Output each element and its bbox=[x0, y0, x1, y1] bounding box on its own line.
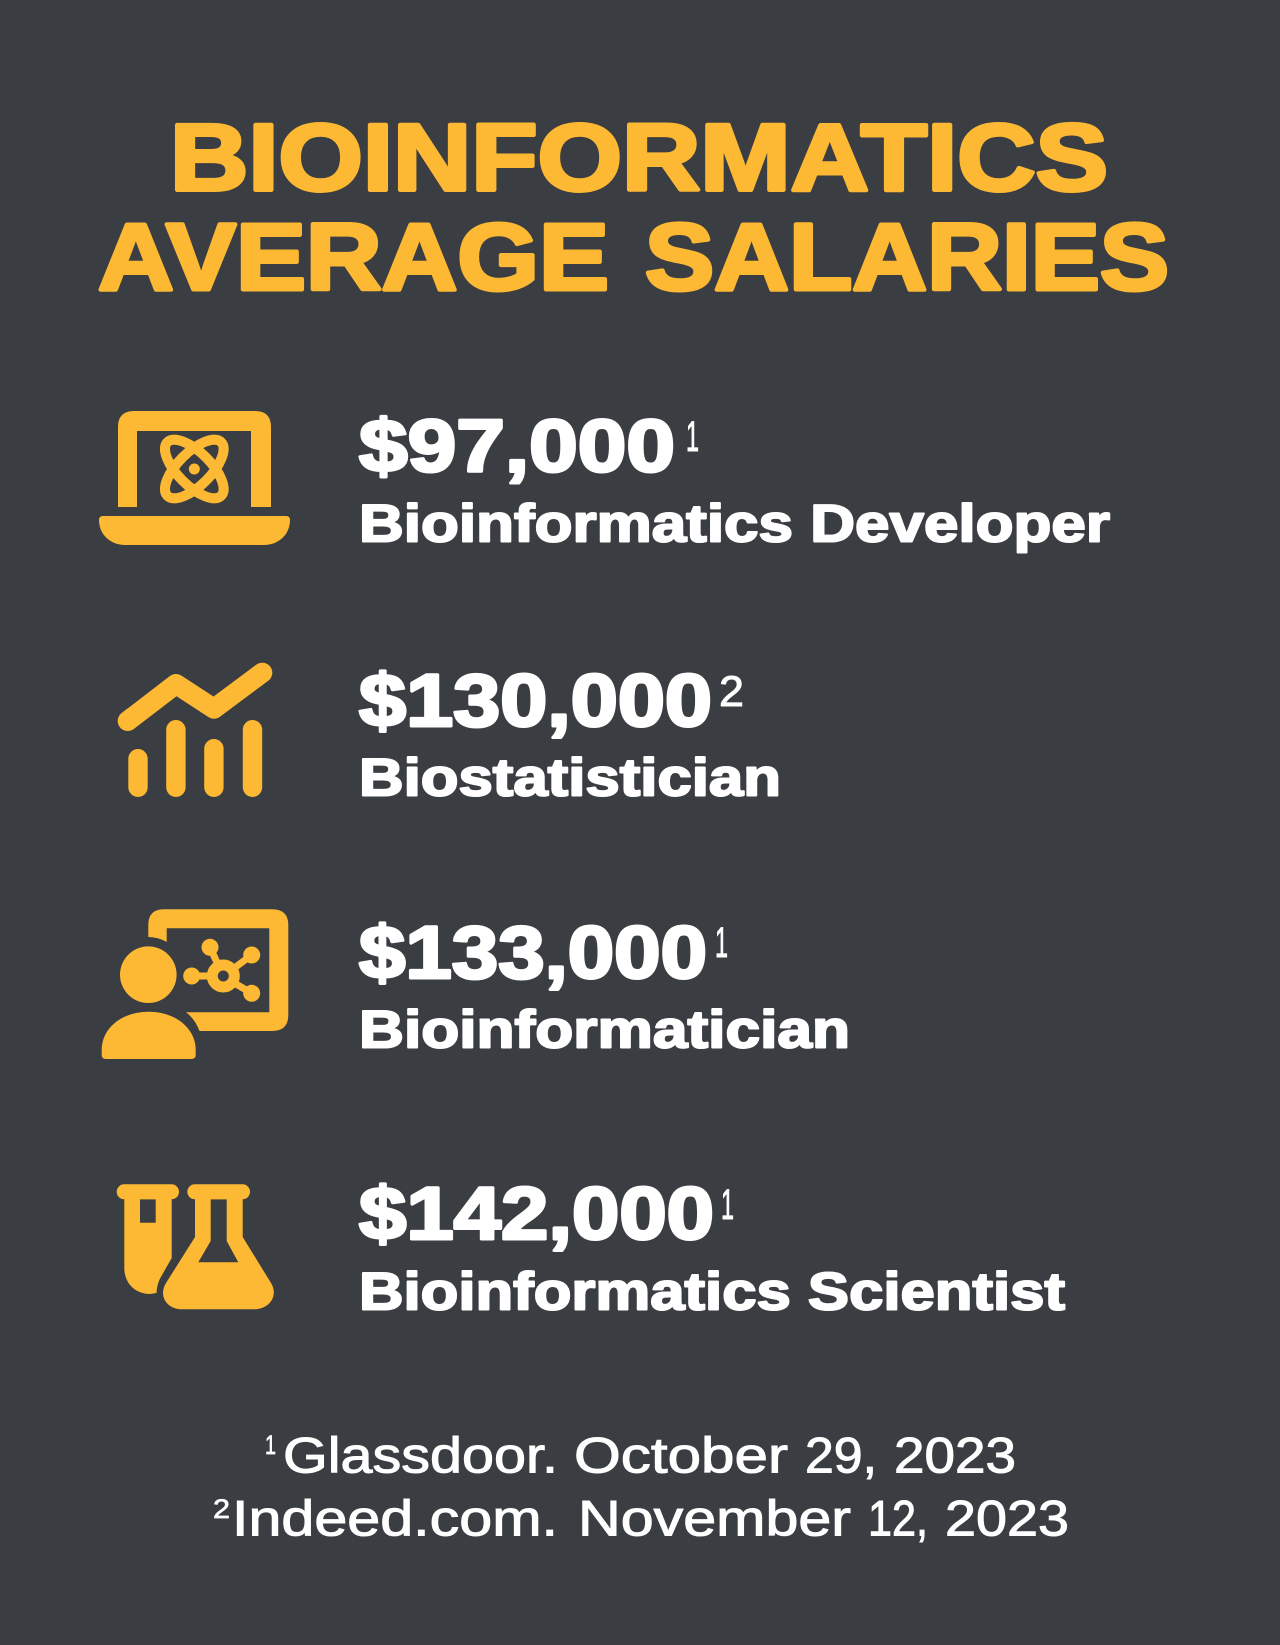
footnotes: sources: October bbox=[574, 1428, 788, 1484]
salary figure: $97,000 bbox=[359, 404, 675, 488]
row: bioinformatician bbox=[102, 909, 850, 1060]
title: SALARIES bbox=[645, 204, 1169, 310]
icon: presenter with molecule board bbox=[102, 909, 288, 1059]
footnotes: sources: 1 bbox=[265, 1430, 276, 1460]
footnotes: sources: 2023 bbox=[894, 1428, 1016, 1484]
footnotes: sources: 29, bbox=[805, 1428, 877, 1484]
job title: Bioinformatics Scientist bbox=[359, 1262, 1065, 1322]
salary figure: $133,000 bbox=[359, 911, 707, 994]
row: bioinformatics scientist bbox=[117, 1172, 1065, 1322]
job title: Bioinformatician bbox=[359, 1000, 850, 1060]
title: BIOINFORMATICS bbox=[170, 105, 1108, 211]
footnote marker: 1 bbox=[686, 413, 699, 461]
title: AVERAGE bbox=[98, 204, 609, 310]
footnote marker: 1 bbox=[721, 1181, 734, 1229]
footnotes: sources: 12, bbox=[868, 1490, 928, 1546]
footnotes: sources bbox=[213, 1428, 1069, 1546]
icon: laptop with atom bbox=[99, 411, 290, 545]
footnotes: sources: November bbox=[578, 1490, 851, 1546]
salary figure: $130,000 bbox=[359, 659, 712, 742]
job title: Biostatistician bbox=[359, 748, 781, 808]
icon: trend line and bars bbox=[128, 673, 262, 797]
title bbox=[98, 105, 1169, 310]
footnote marker: 1 bbox=[715, 919, 728, 967]
footnotes: sources: Indeed.com. bbox=[232, 1490, 558, 1546]
row: biostatistician bbox=[128, 659, 781, 808]
footnotes: sources: 2023 bbox=[945, 1490, 1069, 1546]
salary figure: $142,000 bbox=[359, 1172, 714, 1255]
footnotes: sources: Glassdoor. bbox=[283, 1428, 558, 1484]
row: bioinformatics developer bbox=[99, 404, 1110, 554]
footnote marker: 2 bbox=[719, 668, 744, 716]
job title: Bioinformatics Developer bbox=[359, 494, 1110, 554]
icon: test tube and flask bbox=[117, 1184, 274, 1309]
footnotes: sources: 2 bbox=[213, 1494, 230, 1524]
